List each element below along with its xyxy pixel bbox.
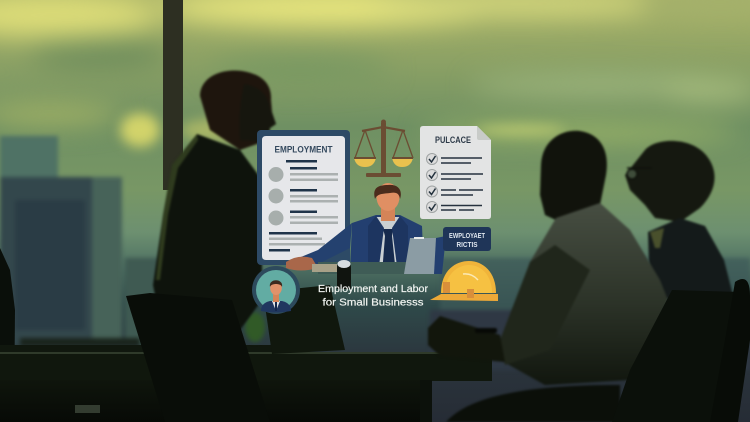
title (318, 283, 428, 308)
table (0, 345, 492, 422)
plant (245, 312, 265, 342)
chair in front of standing man (126, 293, 270, 422)
seated men's chairs (612, 279, 750, 422)
title: for Small Businesss (322, 296, 424, 308)
silhouette: seated man from behind (428, 131, 668, 422)
icon: avatar badge (252, 266, 300, 314)
badge: employment rights (443, 227, 491, 251)
badge: employment rights: RICTIS (456, 240, 478, 249)
silhouette: standing man (153, 70, 276, 330)
window mullion (163, 0, 183, 190)
icon: scales of justice (354, 120, 413, 177)
background: distant skyline (0, 136, 750, 370)
document heading: EMPLOYMENT (274, 144, 333, 154)
checklist heading: PULCACE (435, 135, 471, 145)
figure: businessman in suit (286, 183, 424, 274)
desk strip and laptop (312, 236, 446, 289)
silhouette: seated man with glasses (625, 141, 733, 300)
left edge chair silhouette (0, 248, 15, 422)
document list rows (268, 160, 338, 252)
panel: employment document (257, 130, 350, 265)
icon: hard hat (430, 261, 498, 301)
title: Employment and Labor (318, 283, 428, 295)
panel: policy checklist (420, 126, 491, 219)
badge: employment rights: EWPLOYAET (449, 231, 485, 240)
laptop (263, 285, 345, 354)
checklist rows (426, 154, 483, 212)
